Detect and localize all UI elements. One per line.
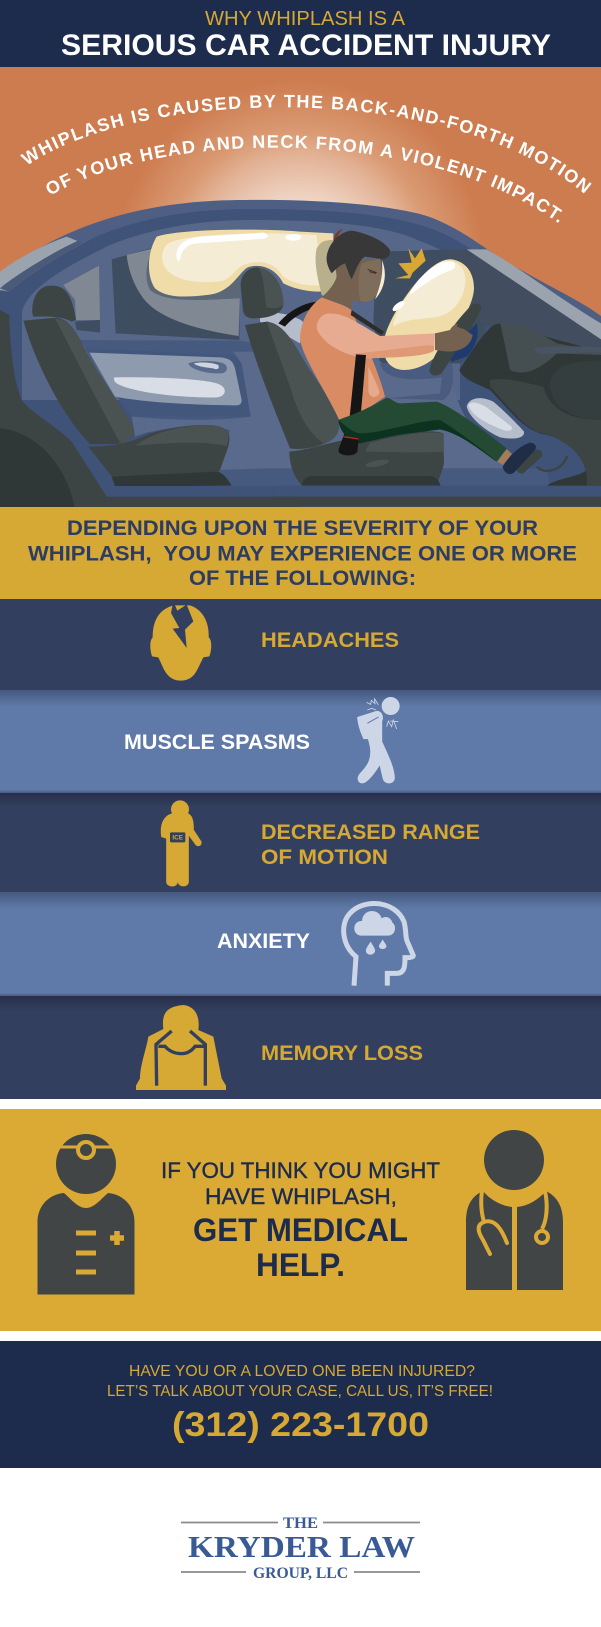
- intro band: [0, 507, 601, 599]
- pedal: [517, 449, 542, 473]
- label: MUSCLE SPASMS: [124, 731, 310, 754]
- driver shirt: [300, 297, 385, 420]
- steering wheel: [429, 304, 482, 376]
- driver trousers: [338, 398, 507, 462]
- label: ANXIETY: [217, 930, 310, 953]
- symptom: anxiety: [0, 892, 601, 996]
- rear side window: [63, 266, 100, 320]
- symptom: decreased range of motion: OF MOTION: [261, 846, 388, 869]
- left portion of the car: [0, 237, 300, 510]
- belt buckle: [338, 437, 359, 455]
- windshield pillar: [467, 249, 601, 339]
- symptom: memory loss: [0, 996, 601, 1099]
- logo: THE: [283, 1515, 318, 1532]
- sill and floor edge: [273, 486, 601, 497]
- door handle: [188, 361, 227, 373]
- steering wheel back: [447, 323, 478, 362]
- phone number: (312) 223-1700: [172, 1406, 429, 1444]
- door frame: [80, 340, 300, 487]
- airbag shade behind head: [316, 240, 337, 296]
- rear cushion: [88, 425, 229, 478]
- ankle: [498, 449, 512, 465]
- car body: [0, 200, 601, 507]
- symptom: headaches: [0, 599, 601, 690]
- firewall: [280, 320, 527, 468]
- steering airbag: [383, 259, 474, 370]
- icon: figure with ice pack: [161, 800, 201, 886]
- driver cushion: [289, 431, 444, 485]
- front side window: [112, 248, 240, 340]
- ear tuft: [333, 229, 343, 242]
- call to action panel: GET MEDICAL: [193, 1212, 408, 1248]
- dashboard: [459, 323, 601, 486]
- rear seat back: [23, 318, 134, 444]
- title line one: WHY WHIPLASH IS A: [205, 8, 406, 30]
- wheel arch: [0, 428, 75, 510]
- shoe: [503, 443, 536, 474]
- rear headrest: [32, 286, 76, 322]
- door highlight: [114, 377, 225, 397]
- icon: figure with back pain: [358, 697, 400, 783]
- door panel: [89, 353, 242, 405]
- contact panel: HAVE YOU OR A LOVED ONE BEEN INJURED?: [129, 1363, 475, 1380]
- symptom: decreased range of motion: [0, 793, 601, 892]
- shoulder belt: [351, 310, 384, 335]
- title line two: SERIOUS CAR ACCIDENT INJURY: [61, 29, 551, 62]
- right portion of the car: [149, 229, 601, 507]
- hero panel: car interior illustration: [0, 67, 601, 507]
- roof strip: [0, 237, 83, 292]
- intro band: OF THE FOLLOWING:: [189, 566, 416, 590]
- call to action panel: [0, 1109, 601, 1331]
- knee bolster: [467, 398, 524, 439]
- icon: head with lightning: [150, 601, 211, 681]
- intro band: WHIPLASH, YOU MAY EXPERIENCE ONE OR MORE: [28, 542, 577, 566]
- driver headrest: [241, 267, 283, 318]
- sill: [107, 486, 300, 497]
- title banner: [0, 0, 601, 67]
- neck and face: [322, 258, 382, 308]
- icon: doctor with head mirror: [38, 1134, 134, 1294]
- curved caption: OF YOUR HEAD AND NECK FROM A VIOLENT IMPACT.: [46, 135, 562, 223]
- logo: KRYDER LAW: [188, 1529, 415, 1564]
- front passenger pillar shape: [0, 310, 300, 510]
- headliner: [22, 220, 460, 400]
- seat belt top: [278, 302, 320, 327]
- logo: GROUP, LLC: [253, 1565, 348, 1582]
- label: MEMORY LOSS: [261, 1042, 423, 1065]
- icon: figure with ice pack: ICE: [172, 834, 183, 841]
- hair: [327, 231, 390, 279]
- rear seat gap gray: [260, 310, 303, 343]
- hand: [435, 324, 473, 352]
- curved caption: WHIPLASH IS CAUSED BY THE BACK-AND-FORTH MOTION: [20, 94, 592, 194]
- call to action panel: HAVE WHIPLASH,: [205, 1184, 397, 1209]
- text: IF YOU THINK YOU MIGHT: [161, 1158, 440, 1183]
- roof inner band: [0, 209, 601, 507]
- windshield: [427, 249, 601, 360]
- label: DECREASED RANGE: [261, 821, 480, 844]
- symptom: muscle spasms: [0, 690, 601, 793]
- contact panel: LET’S TALK ABOUT YOUR CASE, CALL US, IT’S FREE!: [107, 1383, 493, 1400]
- contact panel: [0, 1341, 601, 1468]
- side airbag curtain: [149, 230, 333, 297]
- icon: person holding head: [136, 1005, 226, 1090]
- icon: doctor with stethoscope: [466, 1130, 563, 1290]
- label: HEADACHES: [261, 629, 399, 652]
- icon: head with rain cloud: [344, 903, 413, 986]
- airbag sliver by face: [375, 260, 385, 299]
- rear airbag shadow: [146, 243, 240, 300]
- intro band: DEPENDING UPON THE SEVERITY OF YOUR: [67, 516, 538, 540]
- lower floor band: [280, 468, 550, 487]
- eye: [368, 269, 377, 273]
- driver arm: [317, 313, 435, 358]
- impact star: [395, 248, 426, 278]
- driver seat back: [245, 322, 339, 449]
- call to action panel: HELP.: [256, 1247, 345, 1283]
- logo: [181, 1515, 420, 1582]
